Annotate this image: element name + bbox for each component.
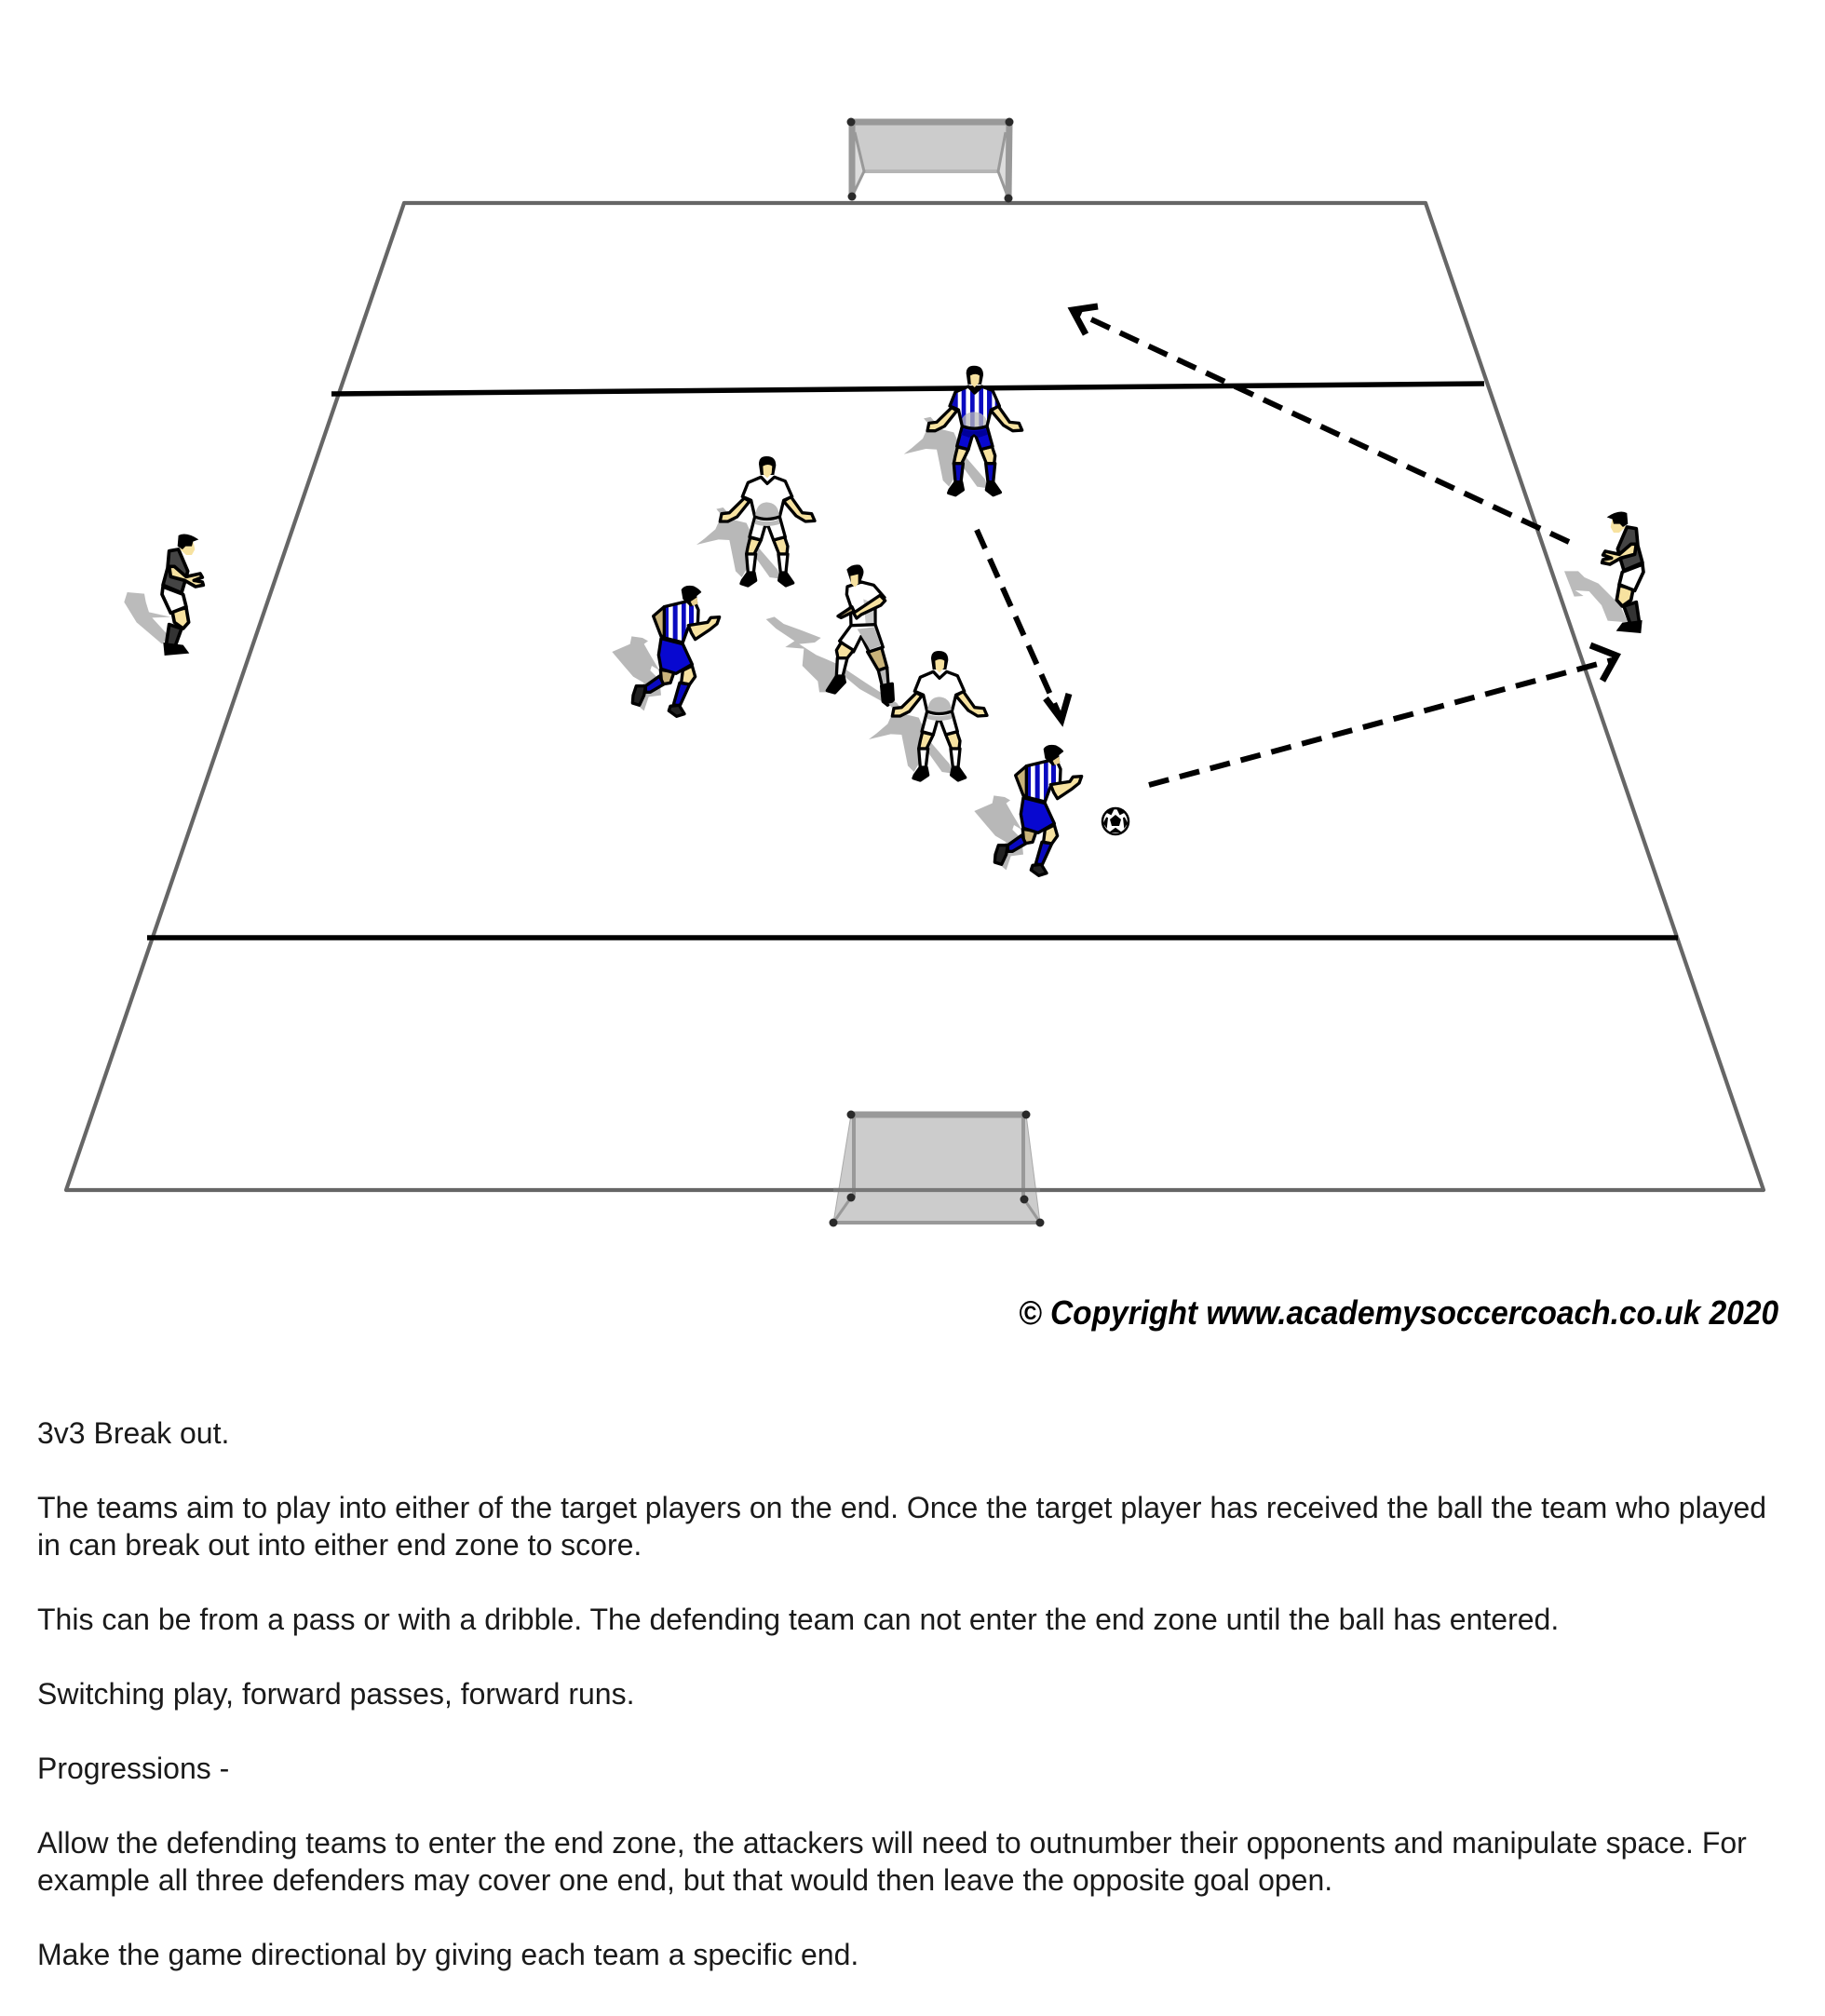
copyright notice: © Copyright www.academysoccercoach.co.uk 2020 — [1019, 1293, 1778, 1332]
player: white side-on — [766, 564, 900, 708]
drill description text: Allow the defending teams to enter the end zone, the attackers will need to outnumber their opponents and manipulate space. For — [37, 1826, 1747, 1860]
drill description text: example all three defenders may cover one end, but that would then leave the opposite goal open. — [37, 1863, 1332, 1897]
player: white standing lower — [869, 651, 987, 780]
top goal — [847, 117, 1013, 203]
bottom goal — [829, 1110, 1045, 1227]
player: blue running left — [612, 586, 720, 716]
soccer drill diagram — [63, 117, 1765, 1227]
drill description text: The teams aim to play into either of the target players on the end. Once the target player has received the ball the team who played — [37, 1491, 1766, 1524]
icon: soccer ball — [1102, 808, 1129, 834]
player: target left — [124, 534, 203, 656]
arrow: pass to right target player — [1149, 645, 1616, 785]
player: target right — [1564, 512, 1643, 633]
pitch outline — [66, 203, 1764, 1190]
drill description text: This can be from a pass or with a dribble. The defending team can not enter the end zone until the ball has entered. — [37, 1603, 1559, 1636]
drill description text: in can break out into either end zone to score. — [37, 1528, 642, 1562]
player: white standing left — [696, 456, 815, 586]
drill description text: 3v3 Break out. — [37, 1416, 229, 1450]
player: blue running with ball — [974, 745, 1082, 875]
arrow: run down to ball carrier — [977, 530, 1069, 720]
drill description text: Switching play, forward passes, forward runs. — [37, 1677, 634, 1711]
drill description text — [37, 1416, 1766, 1971]
drill description text: Progressions - — [37, 1752, 229, 1785]
top end zone line — [331, 384, 1484, 394]
drill description text: Make the game directional by giving each team a specific end. — [37, 1938, 858, 1971]
arrow: long pass to far end — [1073, 306, 1569, 542]
bottom end zone line — [147, 935, 1678, 940]
player: blue defender top — [904, 366, 1022, 495]
